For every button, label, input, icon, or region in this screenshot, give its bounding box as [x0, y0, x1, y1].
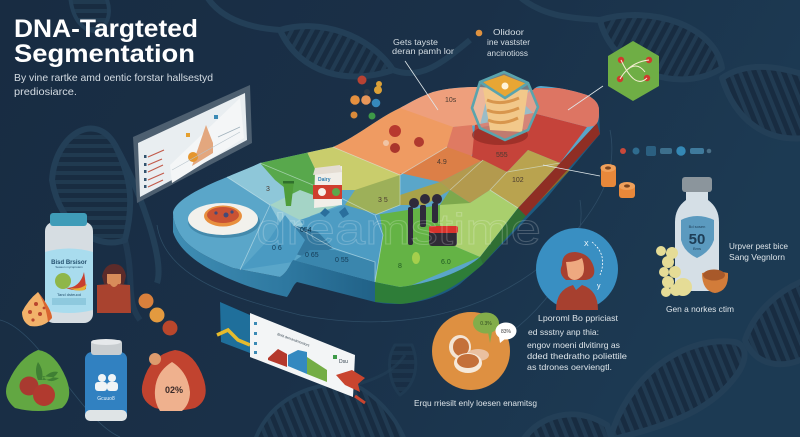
dashboard screen	[133, 85, 252, 203]
map top regions	[173, 86, 599, 287]
orange circle with nuts	[432, 312, 510, 390]
label: top left	[392, 38, 454, 56]
person icon	[97, 264, 131, 313]
report chart: Dsu	[339, 359, 348, 365]
speech bubbles: 83%	[501, 329, 512, 335]
supplement bottle left: Season mycoprotein	[55, 265, 83, 269]
title	[14, 15, 198, 68]
orange bowl	[702, 270, 728, 293]
carton	[313, 165, 349, 218]
meat icon: 02%	[165, 385, 183, 395]
title: DNA-Targteted	[14, 15, 198, 43]
label: top left: Gets tayste	[393, 38, 439, 47]
map value numbers: 555	[496, 152, 508, 159]
leader lines	[405, 61, 603, 176]
meat icon	[142, 350, 206, 411]
glass bottle right: 50	[689, 231, 705, 248]
contour lines	[0, 130, 612, 437]
subtitle: prediosiarce.	[14, 86, 77, 98]
woman caption: Lporoml Bo ppriciast	[538, 313, 619, 323]
supplement bottle left: Tand dsteuod	[57, 292, 81, 297]
map value numbers: 6.0	[441, 259, 451, 266]
map value numbers: 3 5	[378, 197, 388, 204]
green leaf blob	[6, 350, 69, 411]
map value numbers: 102	[512, 177, 524, 184]
paragraph: dded thedratho poliettile	[527, 351, 627, 361]
map value numbers: 054	[300, 227, 312, 234]
map value numbers: 0 65	[305, 252, 319, 259]
subtitle	[14, 72, 213, 98]
paragraph	[527, 327, 627, 372]
glass bottle right: Bd sosen	[689, 224, 705, 229]
map value numbers: 8	[398, 263, 402, 270]
subtitle: By vine rartke amd oentic forstar hallsestyd	[14, 72, 213, 84]
bottle caption: Gen a norkes ctim	[666, 304, 734, 314]
glass bottle right: Bms	[693, 246, 701, 251]
map value numbers: 0 55	[335, 257, 349, 264]
watermark: dreamstime	[256, 205, 541, 254]
report chart: Bold demandmonitors	[277, 332, 310, 348]
title: Segmentation	[14, 40, 195, 68]
woman circle: y	[597, 283, 601, 290]
speech bubbles	[473, 312, 516, 343]
label: top center: ine vastster	[487, 38, 530, 47]
speech bubbles: 0.3%	[480, 321, 492, 327]
green glass	[283, 181, 294, 206]
plate with pie	[188, 203, 260, 238]
map value numbers: 10s	[445, 97, 457, 104]
label: top center	[476, 28, 530, 58]
label: top center: Olidoor	[493, 28, 524, 37]
dot trail	[138, 294, 178, 336]
paragraph: engov moeni dlvitinrg as	[527, 340, 620, 350]
orange caption: Erqu rriesilt enly loesen enamitsg	[414, 398, 537, 408]
map value numbers: 4.9	[437, 159, 447, 166]
label: top center: ancinotioss	[487, 49, 528, 58]
food box red	[429, 226, 458, 246]
paragraph: as tdrones oerviengtl.	[527, 362, 612, 372]
woman circle	[536, 228, 618, 310]
segmented map	[170, 61, 610, 304]
row of small dots	[620, 146, 711, 156]
glass bottle right	[675, 177, 719, 291]
map value numbers	[266, 97, 524, 270]
supplement bottle left: Bisd Brsisor	[51, 260, 87, 266]
map value numbers: 3	[266, 186, 270, 193]
red beans	[383, 125, 424, 153]
right label: Sang Vegnlorn	[729, 252, 785, 262]
label: top left: deran pamh lor	[392, 47, 454, 56]
orange cylinders	[600, 164, 635, 198]
supplement bottle left	[45, 213, 93, 323]
green hexagon DNA icon	[608, 41, 659, 101]
food jar hexagon	[472, 72, 538, 145]
green pear	[412, 252, 420, 264]
yellow gummy bear	[656, 246, 692, 297]
map region borders	[227, 147, 560, 282]
cheese slice	[22, 292, 52, 326]
map value numbers: 0 6	[272, 245, 282, 252]
people silhouettes	[408, 194, 442, 245]
map side walls	[173, 110, 600, 304]
report chart	[217, 302, 365, 403]
right label: Urpver pest bice	[729, 241, 788, 251]
paragraph: ed ssstny anp thia:	[528, 327, 599, 337]
blue bottle: Gcuuo8	[97, 396, 115, 402]
woman circle: X	[584, 241, 589, 248]
blue bottle	[85, 339, 127, 421]
right label	[729, 241, 788, 262]
small dots cluster	[350, 76, 382, 120]
carton: Dairy	[318, 177, 331, 183]
